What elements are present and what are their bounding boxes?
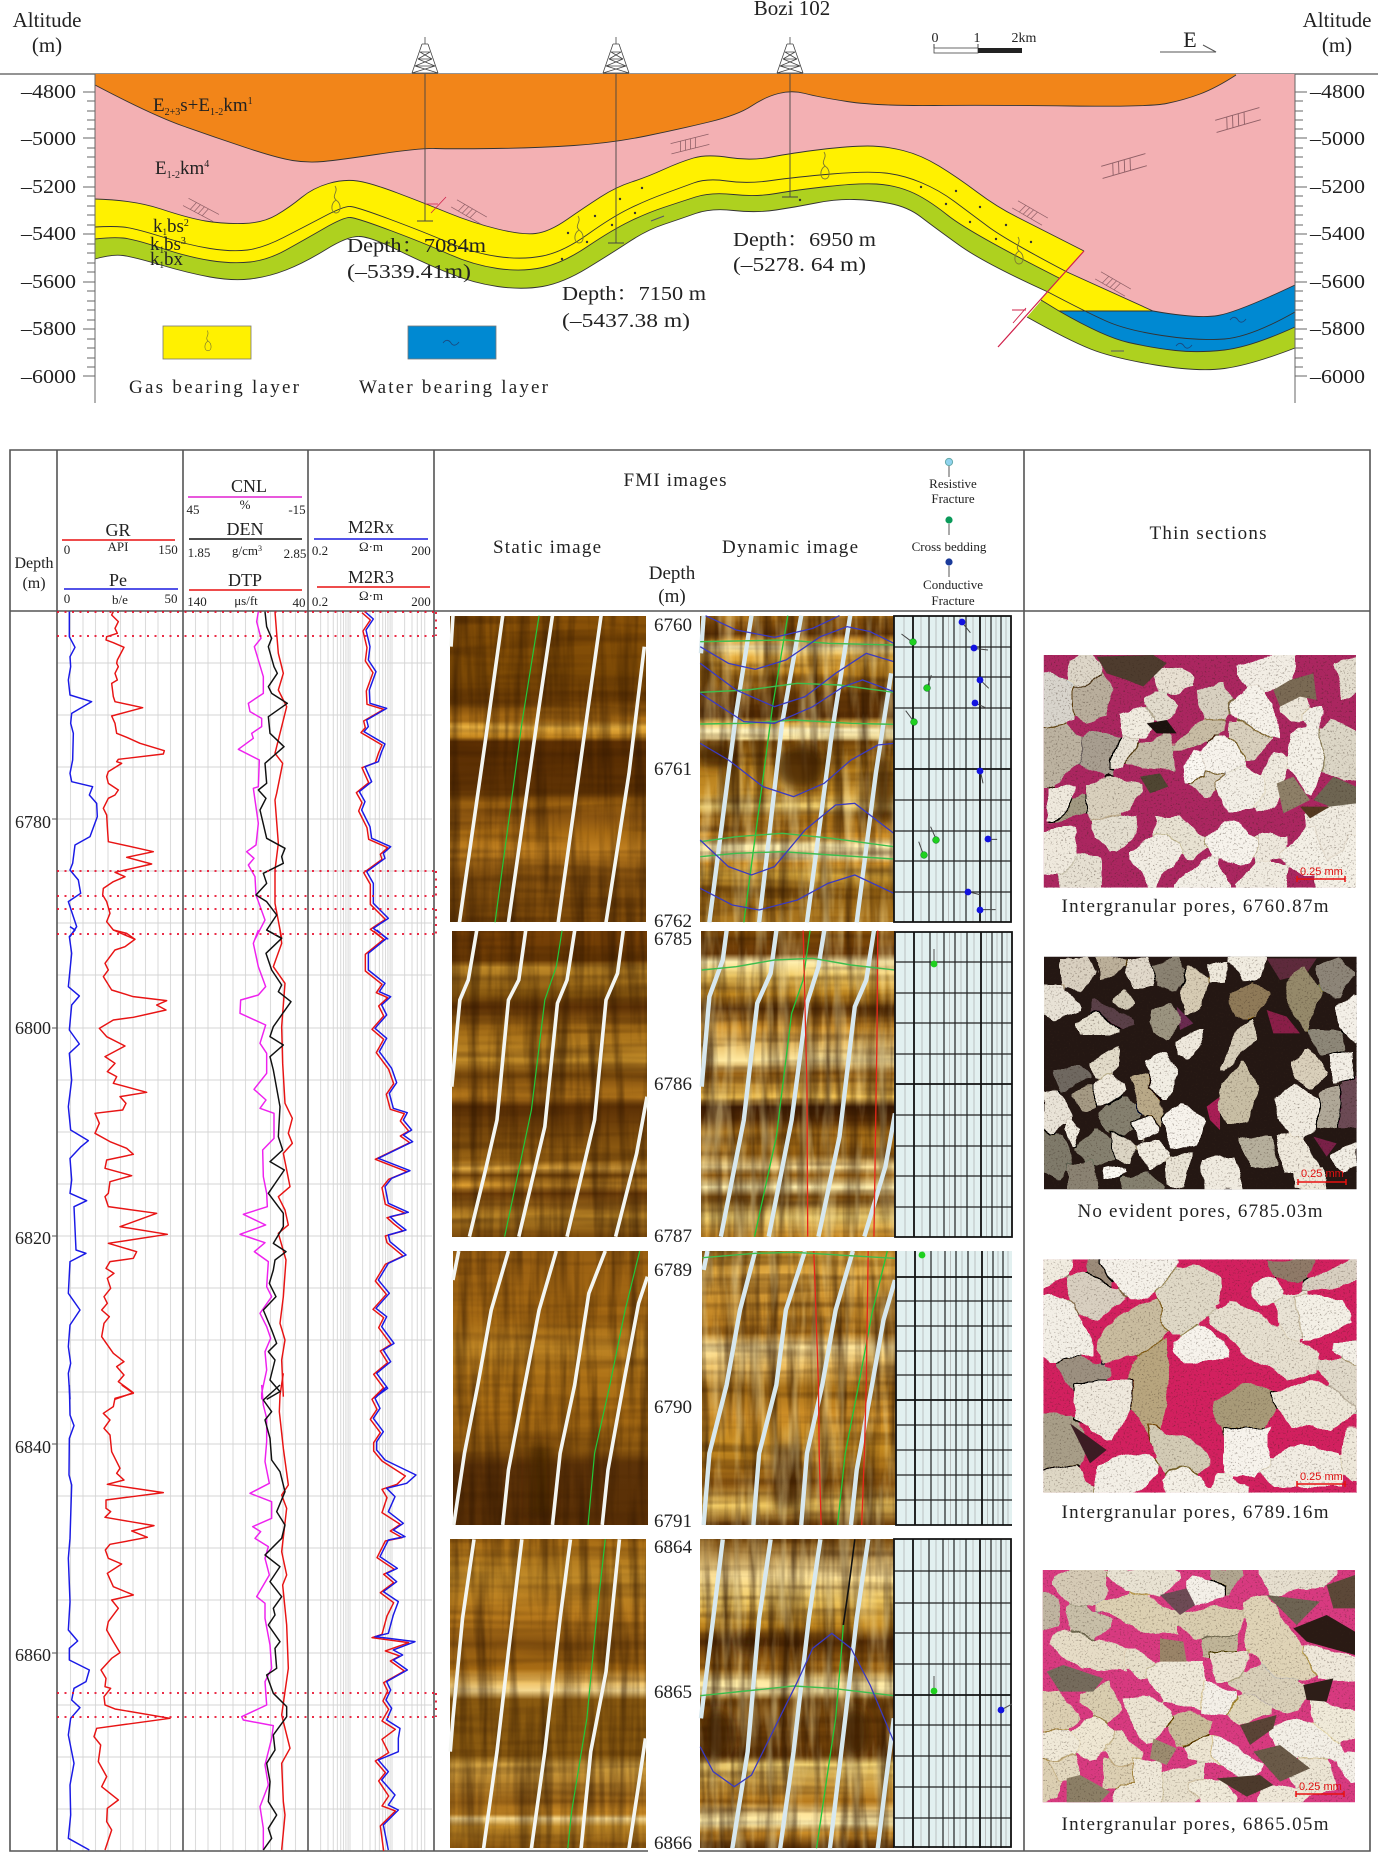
curve: DEN black xyxy=(256,612,291,1850)
right axis title: (m) xyxy=(1322,33,1352,57)
formation labels sandstone: 3 xyxy=(181,236,186,247)
static image 1 xyxy=(450,616,646,922)
layer: pink mudstone east block xyxy=(1067,74,1295,317)
FMI headers: Static image xyxy=(493,537,601,558)
thin section 3 xyxy=(1043,1259,1357,1523)
curve: M2Rx blue xyxy=(359,612,416,1850)
micrograph 2 xyxy=(1044,957,1357,1189)
layer: yellow gas sandstone west block xyxy=(95,74,1084,278)
left altitude labels xyxy=(20,81,76,388)
formation labels sandstone: bs xyxy=(167,216,184,237)
FMI depth labels: 6785 xyxy=(654,929,692,950)
formation label orange: s+E xyxy=(180,95,210,116)
header: CNL xyxy=(186,476,306,517)
caption 3: Intergranular pores, 6789.16m xyxy=(1062,1502,1329,1523)
header: DEN: 1.85 xyxy=(188,545,210,560)
legend: conductive fracture xyxy=(923,558,983,608)
dynamic image 1 xyxy=(696,616,894,922)
thin sections title: Thin sections xyxy=(1150,523,1266,544)
dynamic image 2 xyxy=(701,931,895,1237)
legend: cross bedding: Cross bedding xyxy=(912,539,987,554)
formation label pink: 4 xyxy=(204,159,209,170)
curve: DTP red xyxy=(273,612,292,1850)
fracture markers grid 4 xyxy=(931,1676,1012,1713)
header: DEN: 3 xyxy=(258,544,262,553)
right axis title: Altitude xyxy=(1303,8,1371,32)
formation labels sandstone: 1 xyxy=(162,227,167,237)
header: DTP: μs/ft xyxy=(234,593,258,608)
direction indicator: E xyxy=(1183,27,1197,52)
legend: resistive fracture xyxy=(929,458,977,506)
right altitude labels: –5000 xyxy=(1309,128,1365,150)
scale bar 1: 0.25 mm xyxy=(1300,866,1343,878)
scale bar: 2km xyxy=(1012,31,1037,46)
formation labels sandstone: 1 xyxy=(160,260,164,270)
panel: geological cross-section xyxy=(0,0,1378,403)
header: Pe: Pe xyxy=(109,570,127,590)
fracture marker grid 3 xyxy=(919,1252,925,1258)
scale bar xyxy=(932,31,1037,53)
header: DEN xyxy=(188,519,306,561)
speckle texture 1 xyxy=(1044,655,1356,888)
FMI headers: Dynamic image xyxy=(722,537,858,558)
scale bar 1 xyxy=(1297,866,1345,882)
left altitude labels: –5600 xyxy=(20,271,76,293)
FMI depth labels: 6762 xyxy=(654,911,692,932)
axis left xyxy=(83,74,95,403)
layer: orange E2+3s+E1-2km1 xyxy=(95,74,1236,162)
FMI depth labels: 6866 xyxy=(654,1833,692,1854)
right altitude labels: –4800 xyxy=(1309,81,1365,103)
scale bar 2 xyxy=(1298,1168,1346,1185)
FMI headers xyxy=(493,470,858,558)
layer: green k1bx west block xyxy=(95,74,1084,292)
depth axis labels: 6860 xyxy=(15,1645,51,1665)
FMI depth labels: 6786 xyxy=(654,1074,692,1095)
dynamic image 3 xyxy=(702,1251,896,1525)
fracture grid 2 xyxy=(895,932,1012,1237)
scale bar: 1 xyxy=(974,31,980,46)
micrograph 1 xyxy=(1044,655,1356,888)
legend: water bearing layer: Water bearing layer xyxy=(359,377,549,398)
right altitude labels xyxy=(1309,81,1365,388)
depth axis labels: 6780 xyxy=(15,812,51,832)
left altitude labels: –5400 xyxy=(20,223,76,245)
FMI row 3: 6789-6791 xyxy=(453,1251,1012,1525)
formation label orange: km xyxy=(223,95,248,116)
FMI depth column title xyxy=(649,563,696,607)
header: Pe xyxy=(64,570,178,607)
scale bar 4: 0.25 mm xyxy=(1299,1781,1342,1793)
left altitude labels: –6000 xyxy=(20,366,76,388)
layer boundaries xyxy=(95,75,1295,370)
top datum line xyxy=(0,73,1378,75)
header: DTP: DTP xyxy=(228,570,262,590)
gas symbols xyxy=(332,152,1023,264)
legend: conductive fracture: Fracture xyxy=(931,593,975,608)
right altitude labels: –5400 xyxy=(1309,223,1365,245)
FMI row 2: 6785-6787 xyxy=(452,931,1012,1237)
depth column title xyxy=(14,555,54,592)
depth ticks xyxy=(52,819,57,1653)
left axis title: Altitude xyxy=(13,8,81,32)
speckle texture 4 xyxy=(1043,1570,1355,1802)
formation label orange: 2+3 xyxy=(165,107,180,118)
FMI row 4: 6864-6866 xyxy=(450,1539,1012,1848)
header: DTP: 140 xyxy=(187,594,207,609)
static image 4 xyxy=(450,1539,646,1848)
depth axis labels: 6820 xyxy=(15,1228,51,1248)
right altitude labels: –5800 xyxy=(1309,318,1365,340)
table frame xyxy=(10,450,1370,1851)
header: M2R3 xyxy=(312,567,431,609)
fracture marker grid 2 xyxy=(931,949,937,967)
formation labels sandstone: 1 xyxy=(160,245,164,255)
formation label pink: E xyxy=(155,158,167,179)
header: DEN: g/cm xyxy=(232,543,258,558)
fracture grid 4 xyxy=(894,1539,1012,1848)
thin section 2 xyxy=(1044,957,1357,1222)
scale bar: 0 xyxy=(932,31,938,46)
header: M2R3: 0.2 xyxy=(312,594,328,609)
left axis title: (m) xyxy=(32,33,62,57)
depth note well 3 xyxy=(733,229,876,276)
speckle texture 3 xyxy=(1043,1259,1357,1493)
header: M2R3: M2R3 xyxy=(348,567,394,587)
depth note well 1: Depth：7084m xyxy=(347,235,486,257)
header: M2Rx: 200 xyxy=(411,543,431,558)
FMI depth labels xyxy=(648,615,698,1854)
layer: yellow gas sandstone east block xyxy=(1041,74,1153,311)
legend: resistive fracture: Fracture xyxy=(931,491,975,506)
caption 1: Intergranular pores, 6760.87m xyxy=(1062,896,1329,917)
formation labels sandstone: bx xyxy=(164,249,184,270)
sand dots xyxy=(561,186,1032,260)
header: GR xyxy=(62,520,178,557)
header: M2Rx: M2Rx xyxy=(348,517,394,537)
depth column title: Depth xyxy=(14,555,54,572)
caption 4: Intergranular pores, 6865.05m xyxy=(1062,1814,1329,1835)
header: Pe: b/e xyxy=(112,592,128,607)
thin section 1 xyxy=(1044,655,1356,917)
depth note well 2 xyxy=(562,283,706,332)
water and shale symbols xyxy=(651,216,1246,351)
static image 3 xyxy=(453,1251,648,1525)
FMI row 1: 6760-6762 xyxy=(450,616,1011,922)
left altitude labels: –5800 xyxy=(20,318,76,340)
header: GR: GR xyxy=(105,520,131,540)
formation labels sandstone: k xyxy=(150,249,160,270)
FMI depth labels: 6760 xyxy=(654,615,692,636)
depth note well 3: Depth：6950 m xyxy=(733,229,876,251)
axis right xyxy=(1295,74,1307,403)
header: M2Rx: 0.2 xyxy=(312,543,328,558)
header: CNL: 45 xyxy=(186,502,200,517)
left altitude labels: –5000 xyxy=(20,128,76,150)
FMI depth labels: 6865 xyxy=(654,1682,692,1703)
curve: GR red xyxy=(94,612,170,1850)
depth axis labels xyxy=(15,812,51,1665)
formation label orange: 1 xyxy=(248,96,253,107)
depth note well 1: (–5339.41m) xyxy=(347,261,471,283)
formation labels sandstone: k xyxy=(153,216,162,237)
depth note well 2: (–5437.38 m) xyxy=(562,310,690,332)
header: M2Rx: Ω·m xyxy=(359,539,383,554)
legend: resistive fracture: Resistive xyxy=(929,476,977,491)
fracture grid 1 xyxy=(894,616,1011,922)
left altitude labels: –4800 xyxy=(20,81,76,103)
FMI depth labels: 6864 xyxy=(654,1537,692,1558)
header: M2R3: Ω·m xyxy=(359,588,383,603)
depth note well 3: (–5278. 64 m) xyxy=(733,254,866,276)
formation labels sandstone xyxy=(150,216,189,270)
panel: well log table xyxy=(10,450,1370,1854)
scale bar 3 xyxy=(1297,1471,1345,1487)
left axis title xyxy=(13,8,81,57)
header: Pe: 50 xyxy=(164,591,178,606)
speckle texture 2 xyxy=(1044,957,1357,1189)
formation label pink: km xyxy=(180,158,204,179)
depth note well 2: Depth：7150 m xyxy=(562,283,706,305)
header: M2Rx xyxy=(312,517,431,558)
curve: Pe blue xyxy=(68,612,97,1850)
FMI depth labels: 6787 xyxy=(654,1226,692,1247)
legend: cross bedding xyxy=(912,516,987,554)
micrograph 3 xyxy=(1043,1259,1357,1493)
FMI depth labels: 6761 xyxy=(654,759,692,780)
header: DTP: 40 xyxy=(292,595,306,610)
formation label pink: 1-2 xyxy=(167,170,180,181)
header: DEN: 2.85 xyxy=(284,546,306,561)
formation labels sandstone: 2 xyxy=(184,218,189,229)
right altitude labels: –6000 xyxy=(1309,366,1365,388)
header: CNL: -15 xyxy=(288,502,306,517)
header: DEN: DEN xyxy=(226,519,264,539)
curve: CNL magenta xyxy=(238,612,274,1850)
FMI depth labels: 6790 xyxy=(654,1397,692,1418)
layer: pink E1-2km4 mudstone xyxy=(95,74,1084,251)
layer: blue water-bearing sandstone xyxy=(1041,74,1295,352)
depth axis labels: 6840 xyxy=(15,1437,51,1457)
header: CNL: CNL xyxy=(231,476,267,496)
formation labels sandstone: bs xyxy=(164,234,181,255)
log grid xyxy=(57,611,432,1851)
header: CNL: % xyxy=(240,497,251,512)
FMI headers: FMI images xyxy=(624,470,726,491)
left altitude labels: –5200 xyxy=(20,176,76,198)
direction indicator xyxy=(1160,27,1216,52)
legend: gas bearing layer xyxy=(129,326,300,398)
formation label orange: E xyxy=(153,95,165,116)
legend: gas bearing layer: Gas bearing layer xyxy=(129,377,300,398)
FMI depth labels: 6789 xyxy=(654,1260,692,1281)
scale bar 2: 0.25 mm xyxy=(1301,1168,1344,1180)
thin section 4 xyxy=(1043,1570,1355,1835)
layer: green k1bx east block xyxy=(1027,74,1295,370)
fault line xyxy=(425,197,1084,347)
curve: M2R3 red xyxy=(356,613,410,1851)
formation label orange: 1-2 xyxy=(210,107,223,118)
right axis title xyxy=(1303,8,1371,57)
header: M2R3: 200 xyxy=(411,594,431,609)
caption 2: No evident pores, 6785.03m xyxy=(1078,1201,1323,1222)
header: GR: API xyxy=(108,539,128,554)
depth note well 1 xyxy=(347,235,486,283)
legend: water bearing layer xyxy=(359,326,549,398)
micrograph 4 xyxy=(1043,1570,1355,1802)
FMI depth column title: (m) xyxy=(658,586,686,607)
dynamic image 4 xyxy=(700,1539,894,1848)
depth column title: (m) xyxy=(22,575,46,592)
fracture markers grid 1 xyxy=(901,622,997,910)
header: GR: 150 xyxy=(158,542,178,557)
fracture grid 3 xyxy=(896,1251,1012,1525)
right altitude labels: –5600 xyxy=(1309,271,1365,293)
legend: conductive fracture: Conductive xyxy=(923,577,983,592)
FMI depth column title: Depth xyxy=(649,563,696,584)
depth axis labels: 6800 xyxy=(15,1018,51,1038)
formation labels sandstone: k xyxy=(150,234,160,255)
red dotted interval markers xyxy=(57,612,436,1717)
FMI depth labels: 6791 xyxy=(654,1511,692,1532)
derricks and wellbores xyxy=(412,37,803,243)
right altitude labels: –5200 xyxy=(1309,176,1365,198)
header: GR: 0 xyxy=(64,542,70,557)
scale bar 4 xyxy=(1296,1781,1344,1797)
hatch symbols xyxy=(183,108,1263,297)
header: DTP xyxy=(187,570,306,610)
scale bar 3: 0.25 mm xyxy=(1300,1471,1343,1483)
header: Pe: 0 xyxy=(64,591,70,606)
static image 2 xyxy=(452,931,647,1237)
